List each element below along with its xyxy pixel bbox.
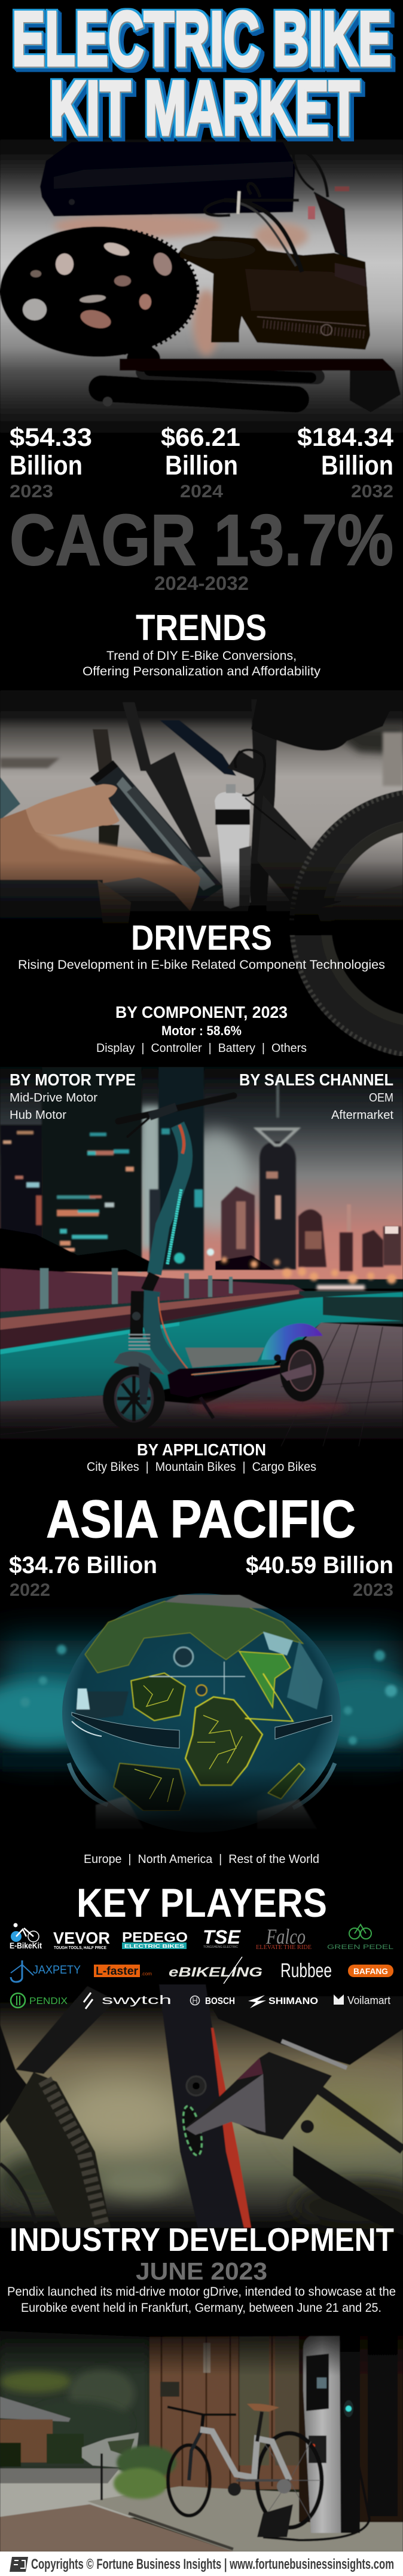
logo: eBikeling bbox=[169, 1957, 262, 1984]
e-scooter bbox=[103, 1096, 324, 1431]
right frame bbox=[314, 2086, 403, 2150]
photo: e-scooter in night city bbox=[0, 1067, 403, 1464]
region heading: ASIA PACIFIC bbox=[46, 1489, 356, 1549]
segment: by component bbox=[96, 1003, 307, 1055]
photo: electric bike conversion kit bbox=[0, 123, 403, 439]
photo: hands fitting e-bike battery bbox=[0, 678, 403, 1056]
e-bike bbox=[167, 2404, 322, 2537]
stat: 2024 market size bbox=[161, 423, 240, 501]
rear wheel bbox=[292, 791, 403, 1056]
key players heading: KEY PLAYERS bbox=[77, 1880, 327, 1926]
motor type text bbox=[10, 1070, 136, 1122]
by application text: BY APPLICATION bbox=[137, 1440, 266, 1459]
mid-drive motor bbox=[180, 236, 370, 350]
logo: Falco: Falco bbox=[265, 1925, 306, 1948]
wiring and connectors bbox=[204, 183, 349, 272]
logo: TSE: TONGSHENG ELECTRIC bbox=[203, 1945, 238, 1949]
continents bbox=[75, 1595, 323, 1811]
globe illustration bbox=[0, 1593, 403, 1847]
trends text: Trend of DIY E-Bike Conversions, bbox=[106, 649, 297, 663]
drivers text: Rising Development in E-bike Related Component Technologies bbox=[18, 958, 385, 972]
bike frame bbox=[93, 699, 395, 926]
logo: Green Pedel: GREEN PEDEL bbox=[327, 1944, 393, 1951]
region values: $40.59 Billion bbox=[246, 1552, 393, 1578]
logo: eBikeling: eBIKELING bbox=[169, 1965, 262, 1980]
sales channel text: OEM bbox=[369, 1091, 393, 1105]
logo: Pendix: PENDIX bbox=[29, 1996, 68, 2006]
motor type text: BY MOTOR TYPE bbox=[10, 1070, 136, 1089]
CAGR figure: 2024-2032 bbox=[154, 573, 249, 594]
trends text: TRENDS bbox=[136, 607, 267, 648]
logo: E-BikeKit: E-BikeKit bbox=[10, 1941, 42, 1950]
stat: 2032 market size: Billion bbox=[321, 450, 393, 481]
removable battery bbox=[90, 760, 224, 905]
industry development text bbox=[7, 2221, 396, 2315]
key player logos bbox=[10, 1923, 393, 2009]
segment: by component: Motor : 58.6% bbox=[161, 1023, 242, 1038]
logo: Swytch bbox=[84, 1993, 172, 2009]
base skyline bbox=[96, 1796, 317, 1829]
motor type text: Hub Motor bbox=[10, 1109, 66, 1122]
region values: 2022 bbox=[10, 1580, 50, 1600]
stat: 2023 market size bbox=[10, 423, 92, 501]
logo: Pedego: ELECTRIC BIKES bbox=[124, 1943, 184, 1949]
lit city detail on continents bbox=[135, 1685, 242, 1802]
industry development text: Eurobike event held in Frankfurt, Germany, between June 21 and 25. bbox=[21, 2300, 381, 2315]
footer bbox=[0, 2551, 403, 2576]
left frame and tyre bbox=[0, 1986, 115, 2228]
logo: Shimano: SHIMANO bbox=[268, 1996, 318, 2006]
photo: rider pressing frame power button bbox=[0, 1984, 403, 2265]
logo: L-faster bbox=[94, 1965, 152, 1978]
ground bbox=[0, 2468, 403, 2551]
logo: Jaxpety: JAXPETY bbox=[33, 1964, 81, 1977]
equatorial ring bbox=[69, 1712, 335, 1808]
trees bbox=[0, 2334, 149, 2471]
stat: 2032 market size bbox=[297, 423, 393, 501]
road and wall bbox=[0, 1268, 305, 1312]
logo: Bafang bbox=[348, 1965, 393, 1977]
stat: 2032 market size: 2032 bbox=[351, 482, 393, 501]
sleeve and glove bbox=[185, 1996, 403, 2140]
logo: Voilamart: Voilamart bbox=[347, 1994, 390, 2006]
logo: Jaxpety bbox=[11, 1960, 81, 1982]
sales channel text bbox=[239, 1070, 393, 1122]
logo: Pedego: PEDEGO bbox=[122, 1929, 188, 1945]
motor type text: Mid-Drive Motor bbox=[10, 1091, 97, 1105]
other regions: Europe | North America | Rest of the World bbox=[84, 1853, 319, 1866]
paving bbox=[0, 1323, 403, 1449]
trends text bbox=[83, 607, 321, 678]
parked car bbox=[82, 2433, 139, 2468]
water bottle bbox=[215, 784, 251, 908]
segment: by component: Display | Controller | Battery | Others bbox=[96, 1042, 307, 1055]
region values: $34.76 Billion bbox=[9, 1552, 157, 1578]
soffit shadow bbox=[0, 2307, 403, 2337]
chainring bbox=[0, 227, 197, 357]
sales channel text: Aftermarket bbox=[331, 1109, 393, 1122]
drivers text: DRIVERS bbox=[131, 919, 272, 957]
crank arms and bottom shadow bbox=[102, 388, 296, 399]
logo: Green Pedel bbox=[327, 1925, 393, 1951]
segment: by component: BY COMPONENT, 2023 bbox=[115, 1003, 288, 1021]
title bbox=[12, 0, 391, 151]
stat: 2024 market size: $66.21 bbox=[161, 423, 240, 452]
logo: L-faster: L-faster bbox=[96, 1965, 139, 1978]
post and bushes bbox=[100, 2446, 176, 2500]
arms and hands bbox=[0, 777, 200, 923]
central frame tube bbox=[159, 1984, 251, 2228]
battery pack bbox=[40, 142, 295, 216]
logo: Rubbee: Rubbee bbox=[280, 1959, 332, 1981]
logo: VEVOR: TOUGH TOOLS, HALF PRICE bbox=[54, 1945, 106, 1950]
logo: E-BikeKit bbox=[10, 1923, 42, 1950]
logo: VEVOR: VEVOR bbox=[53, 1929, 110, 1947]
industry development text: JUNE 2023 bbox=[136, 2257, 267, 2285]
logo: Pendix bbox=[11, 1993, 68, 2008]
logo: Bafang: BAFANG bbox=[353, 1966, 388, 1976]
trends text: Offering Personalization and Affordability bbox=[83, 665, 321, 678]
by application text bbox=[87, 1440, 316, 1474]
logo: Shimano bbox=[248, 1995, 318, 2008]
logo: Swytch: swytch bbox=[102, 1994, 172, 2007]
wooden wall bbox=[149, 2334, 304, 2489]
stat: 2032 market size: $184.34 bbox=[297, 423, 393, 452]
stat: 2023 market size: Billion bbox=[10, 450, 83, 481]
stat: 2023 market size: $54.33 bbox=[10, 423, 92, 452]
logo: Falco: ELEVATE THE RIDE bbox=[256, 1944, 312, 1951]
stat: 2023 market size: 2023 bbox=[10, 482, 53, 501]
logo: Bosch: BOSCH bbox=[205, 1996, 235, 2006]
charging station bbox=[263, 2333, 370, 2540]
logo: Falco bbox=[256, 1925, 312, 1951]
by application text: City Bikes | Mountain Bikes | Cargo Bikes bbox=[87, 1460, 316, 1474]
stat: 2024 market size: Billion bbox=[165, 450, 238, 481]
stat: 2024 market size: 2024 bbox=[180, 482, 223, 501]
foreground foliage and lights bbox=[0, 1228, 155, 1272]
region values bbox=[9, 1552, 393, 1600]
region values: 2023 bbox=[353, 1580, 393, 1600]
footer logo bbox=[10, 2557, 28, 2572]
window lights bbox=[3, 1128, 322, 1272]
logo: TSE: TSE bbox=[203, 1926, 242, 1948]
logo: L-faster: .com bbox=[141, 1971, 152, 1977]
cable loop bbox=[235, 750, 265, 796]
right dark structure bbox=[299, 2319, 403, 2522]
left house bbox=[0, 2397, 84, 2467]
logo: Bosch bbox=[190, 1996, 235, 2006]
skyline bbox=[0, 1067, 401, 1271]
photo: e-bike at charging station bbox=[0, 2307, 403, 2552]
drivers text bbox=[18, 919, 385, 972]
